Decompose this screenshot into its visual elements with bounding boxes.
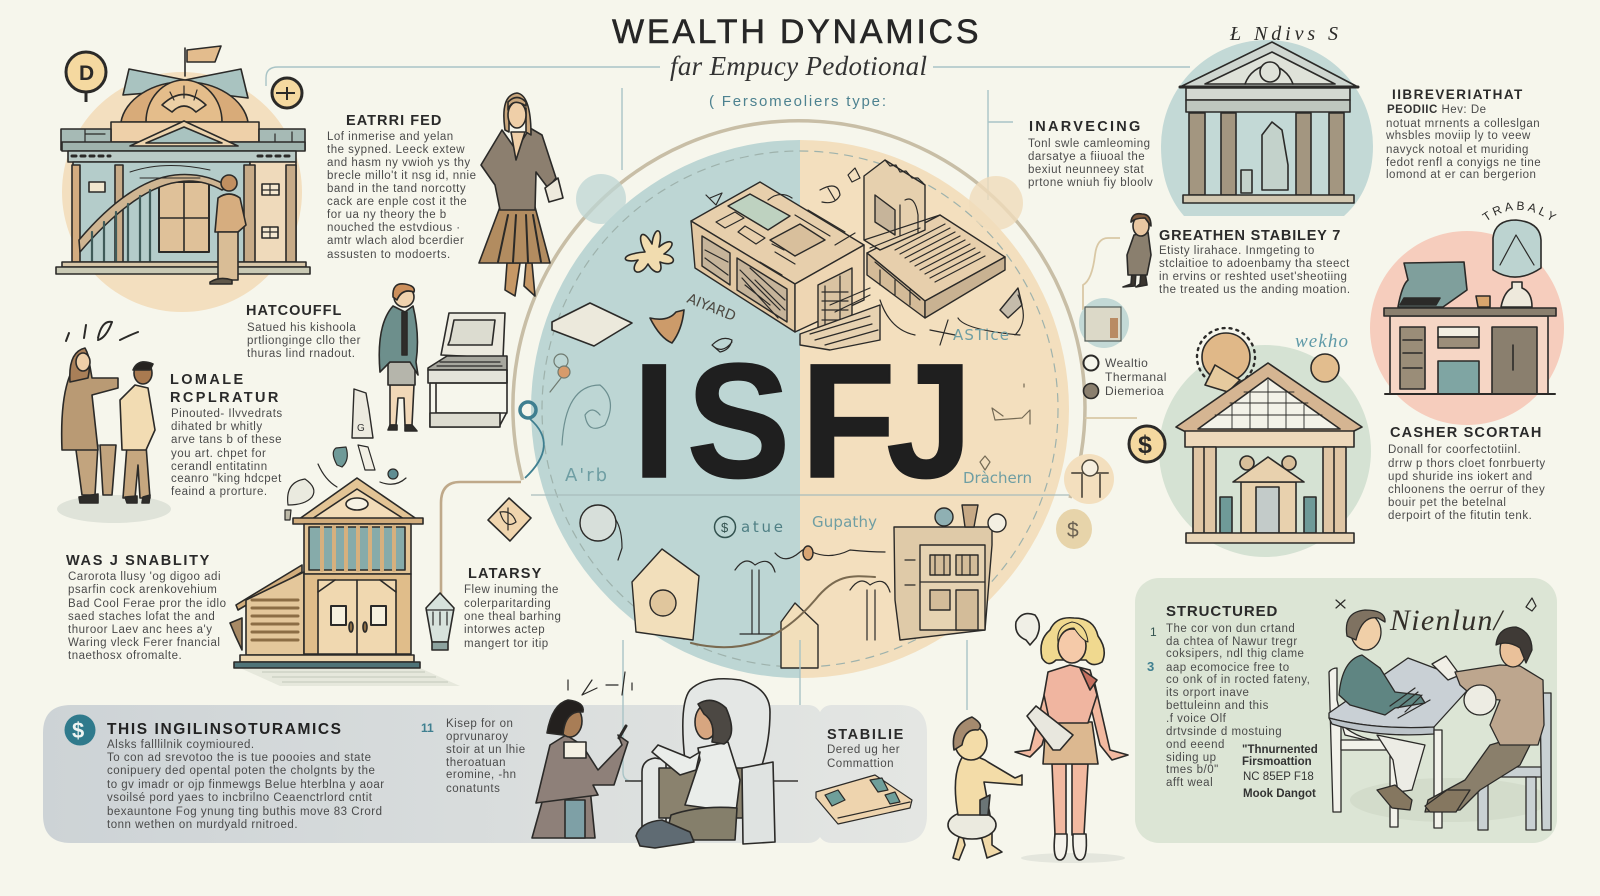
heading: latarsy: LATARSY <box>468 566 543 582</box>
text block: structured: tmes b/0" <box>1166 764 1219 776</box>
second text column: oprvunaroy <box>446 731 509 743</box>
text block: eatrri fed: band in the tand norcotty <box>327 183 466 195</box>
bold callout: Firsmoattion <box>1242 756 1312 768</box>
figure: toddler <box>948 717 1022 860</box>
text block: structured: ond eeend <box>1166 739 1225 751</box>
text block: abbreviation: Hev: De <box>1441 104 1487 116</box>
building: wooden house <box>230 478 460 686</box>
heading: abbreviation: IIBREVERIATHAT <box>1392 87 1524 102</box>
personality type label: ( Fersomeoliers type: <box>709 93 886 110</box>
text block: eatrri fed: amtr wlach alod bcerdier <box>327 235 464 247</box>
text block: eatrri fed: brecle millo't it nsg id, nnie <box>327 170 477 182</box>
icon: side table <box>1064 454 1114 504</box>
icon: arrow glyph <box>980 384 1030 470</box>
lower scene inside circle <box>580 505 1006 668</box>
text block: hatcouffl: thuras lind rnadout. <box>247 348 355 360</box>
text block: abbreviation: PEODIIC <box>1387 104 1441 116</box>
heading: inarvecing: INARVECING <box>1029 119 1142 135</box>
icon: pillow book <box>552 303 632 346</box>
text block: greathen stabiley: stclaitioe to adoenbamy tha steect <box>1159 258 1350 270</box>
icon: plus coin <box>272 78 302 108</box>
second text column: eromine, -hn <box>446 769 517 781</box>
text block: lomale rcplratur: you art. chpet for <box>171 448 266 460</box>
text block: structured: its orport inave <box>1166 687 1249 699</box>
panel text: to gv imadr or ojp finmewgs Belue hterblna y aoar <box>107 779 385 791</box>
bold callout: "Thnurnented <box>1242 744 1318 756</box>
text block: was j snablity: thuroor Laev anc hees a'y <box>68 624 212 636</box>
label: wekho: wekho <box>1295 331 1348 352</box>
figure: small standing child <box>1123 214 1151 287</box>
text block: latarsy: intorwes actep <box>464 624 545 636</box>
icon: map packet <box>816 775 912 824</box>
panel text: bexauntone Fog ynung ting buthis move 83 Crord <box>107 806 383 818</box>
text block: structured: afft weal <box>1166 777 1213 789</box>
panel text: tonn wethen on murdyald rnitroed. <box>107 819 298 831</box>
heading: greathen stabiley: GREATHEN STABILEY 7 <box>1159 228 1342 244</box>
title: WEALTH DYNAMICS <box>612 13 980 51</box>
numeral 3: 3 <box>1147 659 1154 674</box>
label: drachern: Dràchern <box>963 469 1032 487</box>
text block: structured: siding up <box>1166 752 1217 764</box>
curved label: AIYARD <box>685 291 738 325</box>
text block: abbreviation: notuat mrnents a colleslgan <box>1386 118 1540 130</box>
text block: structured: drtvsinde d mostuing <box>1166 726 1282 738</box>
figure: woman with paper <box>479 93 563 296</box>
text block: casher scortah: drrw p thors cloet fonrbuerty <box>1388 458 1546 470</box>
illustration: two people at table <box>1329 610 1551 830</box>
text block: eatrri fed: for ua ny theory the b <box>327 209 447 221</box>
text block: inarvecing: prtone wniuh fiy bloolv <box>1028 177 1153 189</box>
label: value with coin <box>714 516 783 538</box>
text block: was j snablity: Carorota llusy 'og digoo adi <box>68 571 221 583</box>
text block: latarsy: mangert tor itip <box>464 638 549 650</box>
text block: casher scortah: chloonens the oerrur of they <box>1388 484 1545 496</box>
text block: eatrri fed: cack are enple cost it the <box>327 196 467 208</box>
heading: lomale rcplratur: LOMALE <box>170 372 246 388</box>
panel heading: THIS INGILINSOTURAMICS <box>107 721 341 738</box>
bold callout: NC 85EP F18 <box>1243 771 1314 783</box>
icon: dollar badge <box>64 714 96 746</box>
number 11: 11 <box>421 721 434 735</box>
text block: inarvecing: darsatye a fiiuoal the <box>1028 151 1145 163</box>
central circle <box>513 121 1114 678</box>
text block: structured: The cor von dun crtand <box>1166 623 1295 635</box>
text block: lomale rcplratur: Pinouted- Ilvvedrats <box>171 408 283 420</box>
curved label: trabaly <box>1486 210 1558 226</box>
text block: eatrri fed: Lof inmerise and yelan <box>327 131 454 143</box>
heading: casher scortah: CASHER SCORTAH <box>1390 425 1543 441</box>
label: value with coin: atue <box>741 518 783 536</box>
heading: was j snablity: WAS J SNABLITY <box>66 553 211 569</box>
text block: abbreviation: lomond at er can bergerion <box>1386 169 1536 181</box>
heading: eatrri fed: EATRRI FED <box>346 113 443 129</box>
text block: lomale rcplratur: cerandl entitatinn <box>171 461 268 473</box>
text block: inarvecing: Tonl swle camleoming <box>1028 138 1150 150</box>
figure: standing woman gesturing <box>532 700 628 838</box>
figure: man at door <box>210 175 246 284</box>
text block: hatcouffl: Satued his kishoola <box>247 322 356 334</box>
legend <box>1084 356 1167 398</box>
icon: money bag <box>1056 509 1092 549</box>
second text column: theroatuan <box>446 757 506 769</box>
text block: was j snablity: psarfin cock arenkovehium <box>68 584 217 596</box>
text block: latarsy: Flew inuming the <box>464 584 559 596</box>
text block: was j snablity: Bad Cool Ferae pror the idlo <box>68 598 226 610</box>
icon: coin cluster <box>1197 328 1339 392</box>
figure: blonde girl <box>1015 614 1128 863</box>
text block: eatrri fed: assusten to modoerts. <box>327 249 451 261</box>
text block: latarsy: one theal barhing <box>464 611 561 623</box>
icon: flower <box>625 231 673 272</box>
label: astice: ASTice <box>953 326 1009 344</box>
icon: money bag: $ <box>1067 519 1079 542</box>
icon: mini picture circle <box>1079 298 1129 348</box>
second text column: Kisep for on <box>446 718 513 730</box>
legend: Wealtio <box>1105 356 1148 370</box>
panel text: Alsks falllilnik coymioured. <box>107 739 255 751</box>
icon: hanging tag <box>488 498 531 541</box>
building: classical temple <box>1161 40 1373 216</box>
text block: structured: bettuleinn and this <box>1166 700 1269 712</box>
icon: magnifier and spiral <box>550 354 610 445</box>
second text column: conatunts <box>446 783 500 795</box>
text block: latarsy: colerparitarding <box>464 598 551 610</box>
panel: top-left bank <box>56 46 310 312</box>
heading: lomale rcplratur: RCPLRATUR <box>170 390 281 406</box>
text block: casher scortah: bouir pet the betelnal <box>1388 497 1506 509</box>
figure: boy in jacket <box>379 284 418 431</box>
text block: lomale rcplratur: feaind a prorture. <box>171 486 268 498</box>
icon: desktop machine <box>428 313 507 427</box>
decorative marks <box>1336 598 1536 611</box>
icon: marks above speaker <box>568 672 632 695</box>
text block: structured: da chtea of Nawur tregr <box>1166 636 1298 648</box>
label: gupathy: Gupathy <box>812 513 877 531</box>
subtitle: far Empucy Pedotional <box>670 51 927 81</box>
text: stabilie: Commattion <box>827 758 894 770</box>
big letters ISFJ: ISFJ <box>633 329 972 512</box>
text block: hatcouffl: prtlionginge cllo ther <box>247 335 361 347</box>
panel: pink counter <box>1370 202 1564 425</box>
icon: dollar coin <box>1129 426 1165 462</box>
text block: lomale rcplratur: dihated br whitly <box>171 421 263 433</box>
text block: eatrri fed: nouched the estvdious · <box>327 222 461 234</box>
panel: bottom insights <box>43 705 927 843</box>
label: arb: A'rb <box>565 465 607 486</box>
figure: seated woman in armchair <box>636 679 775 848</box>
text block: abbreviation: navyck notoal et muriding <box>1386 144 1529 156</box>
panel text: conipuery ded opental poten the cholgnts by the <box>107 765 375 777</box>
legend: Diemerioa <box>1105 384 1164 398</box>
script text: Nienlun/ <box>1389 604 1505 637</box>
isometric building <box>691 160 1023 352</box>
text block: was j snablity: saed staches lofat the and <box>68 611 215 623</box>
legend: Thermanal <box>1105 370 1167 384</box>
text block: structured: co onk of in rocted fateny, <box>1166 674 1310 686</box>
panel: green temple <box>1159 328 1371 557</box>
connector: pipe with lantern <box>426 402 544 650</box>
panel: structured <box>1135 578 1557 843</box>
heading: structured: STRUCTURED <box>1166 603 1279 620</box>
heading: stabilie: STABILIE <box>827 727 905 743</box>
connector: tan line <box>1083 238 1137 418</box>
text block: lomale rcplratur: ceanro "king hdcpet <box>171 473 282 485</box>
figure: two people talking <box>57 322 171 523</box>
text block: abbreviation: whsbles moviip ly to veew <box>1385 130 1531 142</box>
icon: D coin: D <box>79 62 94 85</box>
icon: flask <box>352 389 373 438</box>
second text column: stoir at un lhie <box>446 744 526 756</box>
heading: hatcouffl: HATCOUFFL <box>246 303 343 319</box>
icon: dollar badge: $ <box>72 718 84 743</box>
text block: casher scortah: Donall for coorfectotiinl. <box>1388 444 1521 456</box>
text block: structured: coksipers, ndl thig clame <box>1166 648 1304 660</box>
text block: eatrri fed: and hasm ny vwioh ys thy <box>327 157 471 169</box>
text block: inarvecing: bexiut neunneey stat <box>1028 164 1144 176</box>
icons above house <box>285 445 406 520</box>
numeral 1: 1 <box>1150 625 1157 639</box>
text block: abbreviation: fedot renfl a conyigs ne tine <box>1386 157 1541 169</box>
panel text: vsoilsé pord yaes to incbrilno Ceaenctrlord cntit <box>107 792 373 804</box>
text block: greathen stabiley: Etisty lirahace. Inmgeting to <box>1159 245 1315 257</box>
text block: lomale rcplratur: arve tans b of these <box>171 434 282 446</box>
text: stabilie: Dered ug her <box>827 744 900 756</box>
text block: eatrri fed: the sypned. Leeck extew <box>327 144 465 156</box>
icon: balloon <box>1016 614 1039 645</box>
text block: greathen stabiley: the treated us the anding moation. <box>1159 284 1351 296</box>
text block: casher scortah: upd shuride ins iokert and <box>1388 471 1533 483</box>
script above temple: Ł Ndivs S <box>1229 23 1338 45</box>
bold callout: Mook Dangot <box>1243 788 1316 800</box>
icon: flask: G <box>357 423 365 434</box>
text block: structured: .f voice Olf <box>1166 713 1227 725</box>
text block: structured: aap ecomocice free to <box>1166 662 1290 674</box>
icon: D coin <box>66 52 106 102</box>
icon: leaf bird <box>650 310 684 343</box>
text block: was j snablity: Waring vleck Ferer fnancial <box>68 637 220 649</box>
text block: casher scortah: derpoirt of the fitutin tenk. <box>1388 510 1532 522</box>
icon: dollar coin: $ <box>1138 431 1152 459</box>
text block: greathen stabiley: in ervins or reshted uset'sheotiing <box>1159 271 1347 283</box>
panel text: To con ad srevotoo the is tue poooies and state <box>107 752 372 764</box>
text block: was j snablity: tnaethosx ofromalte. <box>68 650 182 662</box>
panel: pink counter: TRABALY <box>1482 202 1557 220</box>
label: value with coin: $ <box>721 520 729 535</box>
